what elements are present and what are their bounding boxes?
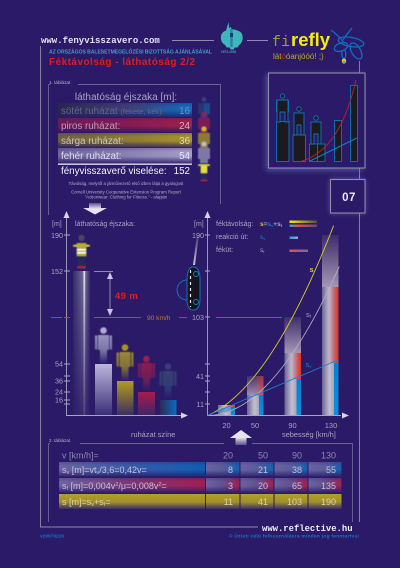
row: total distance: v	[91, 502, 94, 508]
legend: v	[263, 236, 265, 241]
bar: red 24	[138, 392, 155, 415]
row: braking distance: 3	[228, 481, 233, 491]
table 1 notes: Távolság, melyről a járművezető első izben látja a gyalogost	[69, 181, 184, 186]
legend: s	[260, 247, 263, 254]
row: reflective: 152	[174, 166, 190, 177]
header url: www.fenyvisszavero.com	[41, 36, 160, 46]
axis labels: 190	[51, 231, 63, 240]
legend: féktávolság:	[216, 221, 253, 228]
row: red clothing: 24	[179, 121, 191, 132]
row: reaction distance: [m]=vt	[69, 465, 97, 475]
panel: table 2	[49, 438, 342, 509]
row: speed	[62, 450, 336, 460]
row: braking distance: 2	[115, 482, 118, 488]
row: reaction distance: v	[66, 470, 70, 476]
axis labels: 50	[251, 421, 259, 430]
axis labels: 11	[197, 400, 204, 409]
chart: stopping distance by speed: f	[310, 314, 312, 319]
legend: féküt:	[216, 247, 233, 254]
row: red clothing: piros ruházat:	[61, 121, 120, 132]
firefly logo	[272, 28, 365, 64]
row: speed: 90	[292, 450, 302, 460]
arrow: up to table 2	[230, 430, 252, 445]
row: total distance: 190	[321, 497, 336, 507]
axis labels: [m]	[52, 221, 62, 228]
figures: clothing colours	[198, 97, 210, 181]
panel: icon with bars and curves	[266, 73, 365, 171]
footer url: www.reflective.hu	[262, 524, 353, 534]
row: braking distance: 2	[158, 482, 161, 488]
legend: f	[281, 223, 283, 228]
row: reaction distance: 38	[292, 465, 302, 475]
arrow: 49 m difference	[94, 272, 138, 316]
person: yellow	[116, 344, 134, 380]
axis labels: [m]	[194, 221, 204, 228]
row: braking distance: [m]=0,004v	[68, 481, 116, 491]
icon: tree logo	[221, 22, 243, 54]
axis labels	[192, 221, 337, 439]
row: dark clothing: 16	[179, 106, 191, 117]
version: v20070220	[40, 534, 64, 540]
axes	[205, 216, 341, 416]
icon: car with headlight beam	[177, 235, 200, 310]
row: reaction distance: s	[62, 465, 66, 475]
row: total distance	[59, 494, 342, 509]
firefly logo: fi	[272, 34, 290, 51]
panel: table 1: 1. táblázat	[49, 80, 71, 85]
axis labels: 36	[55, 376, 63, 386]
line: 90 km/h: 90 km/h	[147, 315, 171, 322]
row: total distance: 11	[224, 497, 233, 507]
axis labels: 20	[222, 421, 231, 430]
row: yellow clothing	[58, 133, 192, 148]
row: reaction distance	[59, 462, 342, 476]
row: yellow clothing: 36	[179, 136, 191, 147]
row: reaction distance: v	[97, 470, 100, 476]
axis labels: 103	[192, 313, 204, 322]
firefly logo: refly	[291, 29, 331, 50]
row: braking distance: f	[66, 486, 68, 492]
firefly logo: látóóanjóóó! ;)	[273, 52, 324, 61]
chart: stopping distance by speed: s	[306, 310, 310, 319]
title: Féktávolság - láthatóság 2/2	[49, 57, 195, 68]
legend: s=s	[260, 221, 271, 228]
legend	[216, 220, 317, 254]
bar: 50 km/h	[247, 376, 264, 415]
subtitle: AZ ORSZÁGOS BALESETMEGELŐZÉSI BIZOTTSÁG AJÁNLÁSÁVAL	[49, 48, 212, 56]
bar: reflective 152	[73, 271, 90, 415]
row: braking distance: /μ=0,008v	[118, 481, 159, 491]
row: white clothing: 54	[179, 151, 191, 162]
table 1 notes	[69, 181, 184, 200]
person: white	[95, 327, 112, 363]
bar: white 54	[95, 364, 112, 415]
arrow: 49 m difference: 49 m	[115, 291, 138, 302]
frame lines	[40, 40, 360, 527]
axis labels: láthatóság éjszaka:	[75, 221, 135, 228]
icon: tree logo: 1972-1992	[221, 50, 236, 54]
row: total distance: +s	[94, 497, 104, 507]
chart: stopping distance by speed: v	[309, 364, 312, 369]
table 1 notes: Cornell University Cooperative Extension Program Report	[71, 190, 182, 194]
box: page number: 07	[342, 192, 356, 204]
row: reaction distance: 8	[228, 465, 233, 475]
person: dark	[160, 363, 176, 399]
person: red	[138, 356, 155, 391]
bar: 20 km/h	[218, 405, 235, 415]
panel: table 2: 2. táblázat	[49, 438, 71, 443]
row: braking distance: 20	[258, 481, 268, 491]
row: total distance: 103	[287, 497, 302, 507]
axis labels	[51, 221, 175, 439]
legend: +s	[273, 221, 281, 228]
chart: stopping distance by speed: s	[310, 265, 314, 274]
row: braking distance: 135	[321, 481, 336, 491]
curves	[208, 226, 339, 416]
chart: visibility by clothing colour	[51, 211, 282, 439]
box: page number	[330, 179, 365, 213]
row: yellow clothing: sárga ruházat:	[61, 136, 124, 147]
table 1 notes: "Actionwear: Clothing for Fitness." - alapján	[85, 194, 168, 200]
row: speed: 50	[258, 450, 268, 460]
row: reaction distance: 21	[258, 465, 268, 475]
axis labels: 24	[55, 388, 63, 396]
axis labels: 152	[51, 267, 63, 276]
copyright: © Üzleti célú felhasználásra minden jog fenntartva!	[229, 532, 359, 540]
axis labels: sebesség [km/h]	[282, 430, 336, 439]
axis labels: 130	[325, 421, 337, 430]
row: braking distance: 65	[292, 481, 302, 491]
legend: reakció út:	[216, 234, 248, 241]
legend: v	[271, 223, 274, 228]
bar: 90 km/h	[284, 317, 301, 415]
row: dark clothing: sötét ruházat (fekete, kék):	[61, 106, 164, 117]
row: speed: 130	[321, 450, 336, 460]
arrow: down from table 1	[83, 203, 107, 214]
row: speed: 20	[223, 450, 233, 460]
axis labels: 90	[288, 421, 297, 430]
axis labels: 54	[55, 360, 63, 368]
row: total distance: =	[105, 497, 111, 507]
person: reflective	[73, 235, 90, 269]
row: total distance: f	[104, 502, 106, 508]
row: dark clothing	[58, 103, 192, 117]
row: white clothing	[58, 148, 192, 163]
row: total distance: s [m]=s	[62, 497, 91, 507]
row: total distance: 41	[258, 497, 268, 507]
chart: stopping distance by speed: s	[306, 360, 309, 369]
axis labels: 190	[192, 231, 204, 240]
axis labels: 16	[55, 396, 63, 404]
axis labels: ruházat színe	[131, 430, 175, 439]
row: braking distance: =	[161, 481, 167, 491]
row: red clothing	[58, 118, 192, 132]
chart: stopping distance by speed	[192, 211, 349, 439]
legend: s	[260, 234, 263, 241]
row: reaction distance: 55	[326, 465, 336, 475]
axes	[64, 216, 183, 416]
row: reflective: fényvisszaverő viselése:	[61, 166, 167, 177]
row: reaction distance: /3,6=0,42v=	[99, 465, 147, 475]
legend: f	[263, 249, 265, 254]
row: speed: v [km/h]=	[62, 450, 99, 460]
row: white clothing: fehér ruházat:	[61, 151, 121, 162]
bar: 130 km/h	[322, 235, 338, 415]
table 1 heading: láthatóság éjszaka [m]:	[75, 92, 177, 103]
row: braking distance: s	[62, 481, 66, 491]
bar: dark 16	[160, 400, 176, 415]
axis labels: 41	[196, 372, 204, 381]
row: braking distance	[59, 478, 342, 492]
panel: table 1	[49, 80, 210, 200]
bar: yellow 36	[117, 381, 134, 415]
